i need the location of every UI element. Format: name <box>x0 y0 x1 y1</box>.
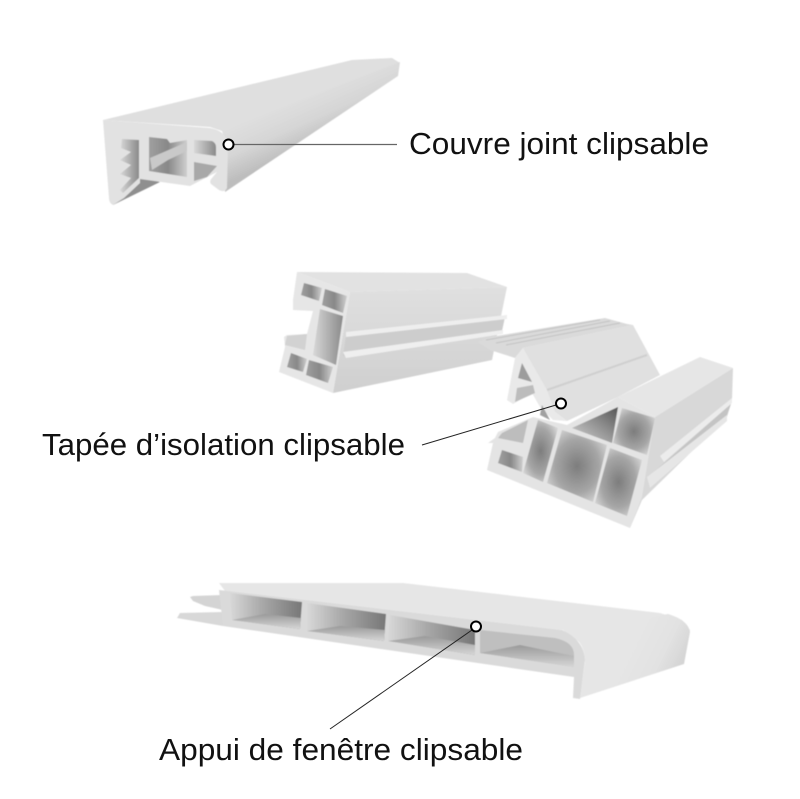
comb slot <box>120 139 139 193</box>
shadow under flange <box>113 176 160 205</box>
cell I <box>595 448 642 516</box>
tapée comb top <box>478 318 633 358</box>
central cell ridge <box>150 142 187 170</box>
rail two <box>647 415 727 488</box>
profile: tapée d'isolation <box>478 318 733 528</box>
notch inset <box>285 334 307 350</box>
marker <box>556 398 566 408</box>
leader line <box>232 144 397 146</box>
cell J <box>613 408 655 455</box>
front face <box>219 590 585 699</box>
rail shadow <box>649 404 731 476</box>
tapée slope <box>523 325 660 421</box>
tapée hole upper <box>518 363 532 382</box>
front face <box>103 120 228 205</box>
tapée groove <box>547 355 647 390</box>
tapée front <box>507 348 567 421</box>
callout: appui <box>330 622 481 729</box>
cell 3 wall <box>388 615 475 655</box>
lower body top <box>618 357 733 417</box>
marker <box>471 622 481 632</box>
label: couvre joint: Couvre joint clipsable <box>409 126 709 161</box>
marker <box>224 140 234 150</box>
cell 3 floor <box>388 636 475 655</box>
leader line <box>330 630 472 729</box>
cell 2 wall <box>307 603 386 641</box>
top surface <box>219 583 690 650</box>
label: appui: Appui de fenêtre clipsable <box>159 732 523 767</box>
cell 1 wall <box>230 593 302 629</box>
leader line <box>422 405 556 445</box>
tapée hole lower <box>515 385 535 402</box>
callout: tapée <box>422 398 566 445</box>
front face <box>279 272 350 393</box>
cell K <box>572 407 618 443</box>
rail one <box>660 398 732 462</box>
cell 1 floor <box>232 614 301 629</box>
side surface <box>333 287 507 393</box>
right cell lower <box>194 162 217 181</box>
cell 4 wall <box>480 630 574 667</box>
callout: couvre joint <box>224 140 397 150</box>
lower body side <box>630 368 733 528</box>
central cell <box>149 137 187 177</box>
cell H <box>547 430 607 502</box>
profile: couvre joint clipsable <box>103 58 400 205</box>
upper rail <box>346 315 507 337</box>
rail band <box>343 317 505 356</box>
tapée hole small <box>540 405 550 420</box>
profile: appui de fenêtre <box>177 583 690 699</box>
lower rail <box>343 330 503 358</box>
comb teeth <box>486 320 620 345</box>
lower body front <box>487 397 655 528</box>
top surface <box>297 272 507 292</box>
inset left <box>498 420 528 443</box>
clip lower <box>177 612 223 626</box>
top surface <box>103 58 400 134</box>
right cell upper <box>194 140 216 156</box>
profile: dormant <box>279 272 507 393</box>
cell G <box>523 420 558 482</box>
cell 4 floor <box>480 645 574 667</box>
clip upper <box>190 595 223 610</box>
cell 2 floor <box>307 626 385 641</box>
label: tapée: Tapée d’isolation clipsable <box>42 427 405 462</box>
nose side <box>566 614 690 698</box>
cells <box>301 283 322 301</box>
side surface <box>222 62 400 192</box>
cell left low <box>498 450 523 472</box>
